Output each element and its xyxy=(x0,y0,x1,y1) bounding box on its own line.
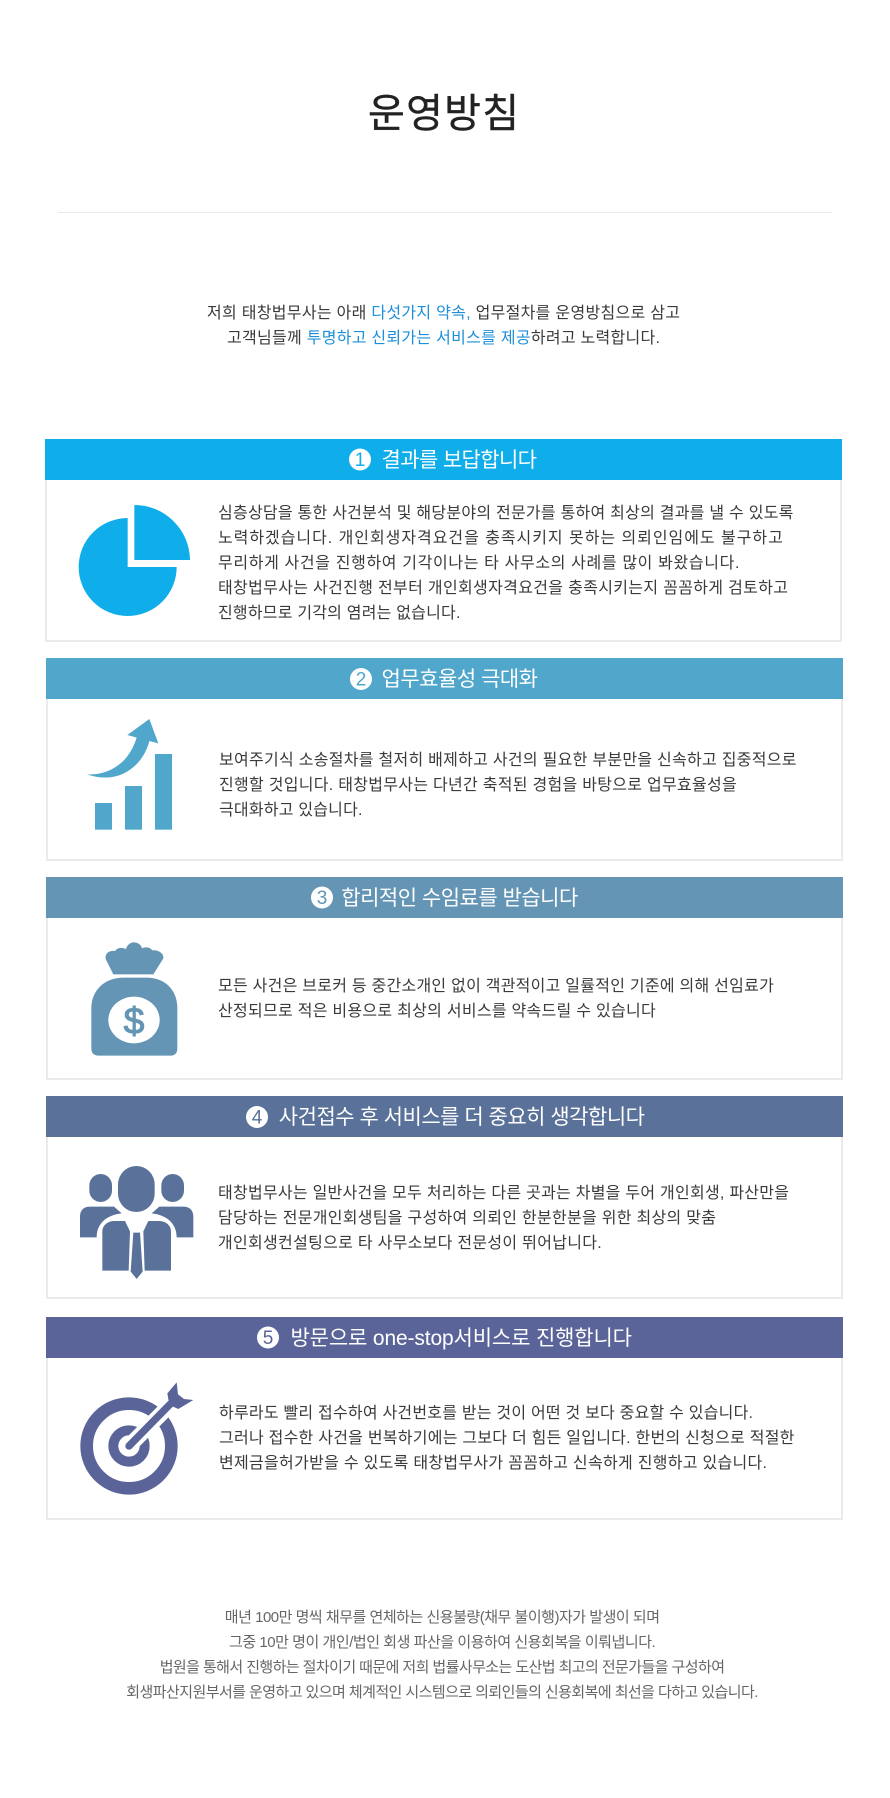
panel: 3 합리적인 수임료를 받습니다 xyxy=(46,877,843,1079)
icon: pie chart xyxy=(79,505,190,616)
text block 5: 변제금을허가받을 수 있도록 태창법무사가 꼼꼼하고 신속하게 진행하고 있습니다. xyxy=(219,1454,767,1472)
text block 5: 하루라도 빨리 접수하여 사건번호를 받는 것이 어떤 것 보다 중요할 수 있습니다. xyxy=(219,1404,753,1422)
heading bar 2: 2 xyxy=(356,670,366,690)
text block 4 xyxy=(218,1184,789,1252)
text block 3: 모든 사건은 브로커 등 중간소개인 없이 객관적이고 일률적인 기준에 의해 선임료가 xyxy=(218,977,774,995)
heading bar 4: 사건접수 후 서비스를 더 중요히 생각합니다 xyxy=(279,1106,645,1129)
footer text: 매년 100만 명씩 채무를 연체하는 신용불량(채무 불이행)자가 발생이 되며 xyxy=(225,1609,660,1626)
footer text: 법원을 통해서 진행하는 절차이기 때문에 저희 법률사무소는 도산법 최고의 전문가들을 구성하여 xyxy=(160,1659,725,1676)
icon: money bag: $ xyxy=(124,999,145,1041)
text block 1: 노력하겠습니다. 개인회생자격요건을 충족시키지 못하는 의뢰인임에도 불구하고 xyxy=(218,529,783,547)
text block 5 xyxy=(219,1404,795,1472)
heading bar 5 xyxy=(46,1317,843,1358)
heading bar 4: 4 xyxy=(252,1108,263,1128)
text block 2: 보여주기식 소송절차를 철저히 배제하고 사건의 필요한 부분만을 신속하고 집중적으로 xyxy=(219,751,796,769)
heading bar 4 xyxy=(46,1096,843,1137)
heading bar 2: 업무효율성 극대화 xyxy=(382,668,538,691)
text block 4: 개인회생컨설팅으로 타 사무소보다 전문성이 뛰어납니다. xyxy=(218,1234,602,1252)
text block 1 xyxy=(218,504,793,622)
heading bar 1 xyxy=(45,439,842,480)
text block 1: 진행하므로 기각의 염려는 없습니다. xyxy=(218,604,460,622)
intro text xyxy=(207,304,680,347)
title: 운영방침 xyxy=(368,92,519,136)
heading bar 1: 1 xyxy=(355,450,365,471)
footer text: 회생파산지원부서를 운영하고 있으며 체계적인 시스템으로 의뢰인들의 신용회복에 최선을 다하고 있습니다. xyxy=(126,1684,758,1701)
text block 2: 극대화하고 있습니다. xyxy=(219,801,362,819)
text block 2 xyxy=(219,751,796,819)
text block 3: 산정되므로 적은 비용으로 최상의 서비스를 약속드릴 수 있습니다 xyxy=(218,1002,656,1020)
text block 3 xyxy=(218,977,774,1020)
text block 1: 심층상담을 통한 사건분석 및 해당분야의 전문가를 통하여 최상의 결과를 낼 수 있도록 xyxy=(218,504,793,522)
heading bar 3: 합리적인 수임료를 받습니다 xyxy=(341,887,578,910)
icon: team of people xyxy=(80,1166,193,1279)
panel: 2 업무효율성 극대화 xyxy=(46,658,843,860)
text block 5: 그러나 접수한 사건을 번복하기에는 그보다 더 힘든 일입니다. 한번의 신청으로 적절한 xyxy=(219,1429,795,1447)
text block 4: 태창법무사는 일반사건을 모두 처리하는 다른 곳과는 차별을 두어 개인회생, 파산만을 xyxy=(218,1184,789,1202)
footer text: 그중 10만 명이 개인/법인 회생 파산을 이용하여 신용회복을 이뤄냅니다. xyxy=(229,1634,656,1651)
panel: 1 결과를 보답합니다 xyxy=(45,439,842,641)
icon: target with arrow xyxy=(87,1382,193,1488)
heading bar 3 xyxy=(46,877,843,918)
heading bar 2 xyxy=(46,658,843,699)
text block 1: 무리하게 사건을 진행하여 기각이나는 타 사무소의 사례를 많이 봐왔습니다. xyxy=(218,554,739,572)
panel: 4 사건접수 후 서비스를 더 중요히 생각합니다 xyxy=(46,1096,843,1298)
panel: 5 방문으로 one-stop서비스로 진행합니다 xyxy=(46,1317,843,1519)
intro text: 고객님들께 투명하고 신뢰가는 서비스를 제공하려고 노력합니다. xyxy=(227,329,660,347)
heading bar 5: 5 xyxy=(263,1328,273,1349)
icon: money bag xyxy=(91,942,177,1056)
heading bar 5: 방문으로 one-stop서비스로 진행합니다 xyxy=(290,1327,632,1350)
icon: rising bar chart with arrow xyxy=(87,719,172,830)
text block 1: 태창법무사는 사건진행 전부터 개인회생자격요건을 충족시키는지 꼼꼼하게 검토하고 xyxy=(218,579,788,597)
text block 4: 담당하는 전문개인회생팀을 구성하여 의뢰인 한분한분을 위한 최상의 맞춤 xyxy=(218,1209,716,1227)
text block 2: 진행할 것입니다. 태창법무사는 다년간 축적된 경험을 바탕으로 업무효율성을 xyxy=(219,776,737,794)
intro text: 저희 태창법무사는 아래 다섯가지 약속, 업무절차를 운영방침으로 삼고 xyxy=(207,304,680,322)
heading bar 3: 3 xyxy=(317,888,327,909)
heading bar 1: 결과를 보답합니다 xyxy=(382,449,537,472)
footer text xyxy=(126,1609,758,1701)
